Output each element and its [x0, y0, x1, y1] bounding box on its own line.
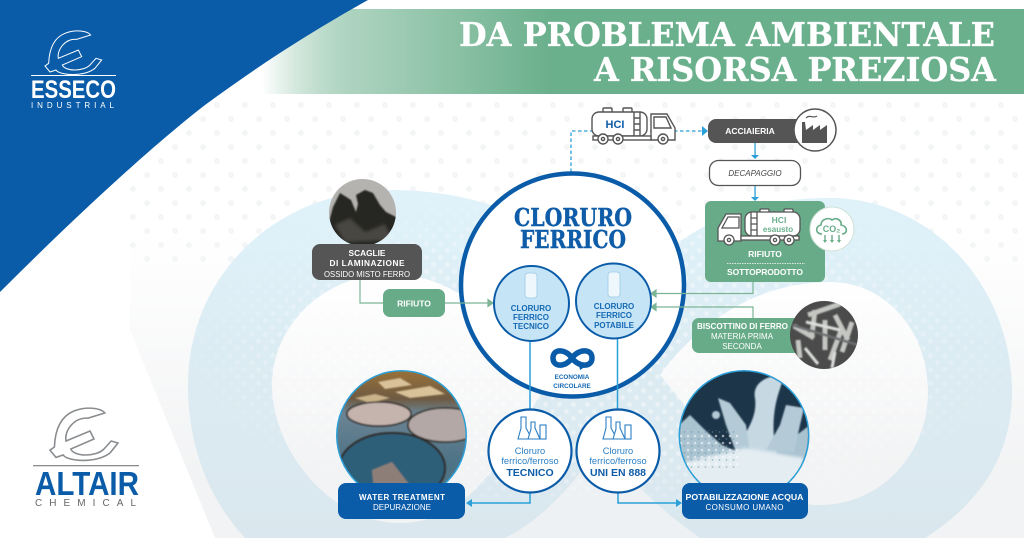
- icon: CO2 cloud: CO₂: [823, 224, 840, 234]
- connectors: outputs: [468, 339, 679, 503]
- node: technical ferric chloride: TECNICO: [513, 322, 549, 331]
- icon: CO2 cloud: [810, 207, 854, 251]
- icon: truck spent HCl: [718, 209, 800, 245]
- panel: water treatment: DEPURAZIONE: [373, 503, 431, 512]
- panel: drinking water: [678, 370, 810, 519]
- connectors: right inputs: [651, 282, 753, 318]
- product: technical grade: Cloruro: [515, 446, 545, 456]
- blue corner: [0, 0, 368, 292]
- logo: Altair Chemical: [33, 408, 139, 509]
- panel: iron briquette: BISCOTTINO DI FERRO: [697, 322, 789, 331]
- pickling step: DECAPAGGIO: [728, 169, 782, 178]
- box: waste: [383, 289, 445, 317]
- header banner: [262, 9, 1024, 94]
- connectors: scale to technical: [360, 280, 493, 306]
- panel: iron briquette: MATERIA PRIMA: [711, 332, 774, 341]
- photo: iron briquettes: [790, 301, 858, 369]
- panel: water treatment: [336, 370, 467, 519]
- panel: iron briquette: SECONDA: [722, 342, 762, 351]
- product: UNI EN 888 grade: UNI EN 888: [590, 467, 646, 479]
- icon: truck HCl: [592, 108, 675, 144]
- icon: truck HCl: HCI: [606, 119, 624, 131]
- panel: iron briquette: [692, 301, 858, 369]
- logo: Altair Chemical: CHEMICAL: [35, 498, 136, 509]
- icon: circular economy: [553, 351, 592, 390]
- icon: circular economy: ECONOMIA: [555, 374, 590, 381]
- background: [130, 102, 1024, 538]
- steel mill node: ACCIAIERIA: [725, 126, 775, 136]
- title: A RISORSA PREZIOSA: [593, 50, 996, 89]
- node: technical ferric chloride: [494, 266, 569, 341]
- photo: treatment tanks: [336, 370, 467, 483]
- panel: drinking water: POTABILIZZAZIONE ACQUA: [686, 493, 804, 502]
- heading: CLORURO: [514, 203, 632, 232]
- panel: mill scale: OSSIDO MISTO FERRO: [324, 270, 410, 279]
- logo: Altair Chemical: ALTAIR: [35, 465, 139, 502]
- panel: drinking water: CONSUMO UMANO: [706, 503, 784, 512]
- panel: mill scale: DI LAMINAZIONE: [330, 258, 405, 268]
- icon: euro outline: [45, 31, 102, 75]
- panel: mill scale: SCAGLIE: [349, 248, 386, 258]
- arrow: into drinking water: [676, 499, 682, 507]
- product: UNI EN 888 grade: [576, 410, 660, 492]
- logo: Esseco Industrial: ESSECO: [31, 76, 116, 104]
- heading: [514, 203, 632, 254]
- node: drinking-grade ferric chloride: CLORURO: [594, 302, 634, 311]
- node: technical ferric chloride: FERRICO: [513, 313, 549, 322]
- heading: FERRICO: [520, 225, 626, 254]
- panel: main circle ferric chloride: [461, 174, 684, 396]
- steel mill node: [708, 109, 836, 151]
- icon: euro outline: [50, 408, 118, 460]
- arrows: process flow: [751, 143, 759, 201]
- logo: Esseco Industrial: [31, 31, 116, 110]
- icon: truck spent HCl: HCI: [772, 215, 786, 225]
- dashed arrow: HCl to steel mill: [571, 126, 708, 172]
- product: UNI EN 888 grade: Cloruro: [603, 446, 633, 456]
- title: DA PROBLEMA AMBIENTALE: [459, 15, 995, 54]
- panel: spent HCl by-product: SOTTOPRODOTTO: [727, 267, 803, 277]
- photo: water splash: [678, 370, 810, 483]
- node: drinking-grade ferric chloride: POTABILE: [594, 321, 635, 330]
- icon: flasks: [603, 417, 631, 439]
- product: technical grade: TECNICO: [506, 467, 554, 479]
- arrow: into water treatment: [466, 499, 472, 507]
- logo: Esseco Industrial: INDUSTRIAL: [31, 101, 115, 110]
- panel: spent HCl by-product: [705, 201, 854, 282]
- photo: mill scale: [329, 179, 396, 246]
- title: [459, 15, 996, 89]
- icon: factory: [794, 109, 836, 151]
- icon: truck spent HCl: esausto: [763, 225, 793, 234]
- product: UNI EN 888 grade: ferrico/ferroso: [589, 456, 647, 466]
- node: drinking-grade ferric chloride: [576, 264, 651, 338]
- pickling step: [710, 160, 800, 186]
- node: drinking-grade ferric chloride: FERRICO: [596, 311, 632, 320]
- panel: mill scale: [312, 179, 422, 280]
- product: technical grade: [488, 410, 572, 492]
- panel: water treatment: WATER TREATMENT: [359, 493, 445, 502]
- node: technical ferric chloride: CLORURO: [511, 304, 551, 313]
- box: waste: RIFIUTO: [397, 298, 431, 308]
- icon: flasks: [518, 417, 546, 439]
- icon: circular economy: CIRCOLARE: [553, 383, 591, 390]
- product: technical grade: ferrico/ferroso: [501, 456, 559, 466]
- panel: spent HCl by-product: RIFIUTO: [748, 249, 782, 259]
